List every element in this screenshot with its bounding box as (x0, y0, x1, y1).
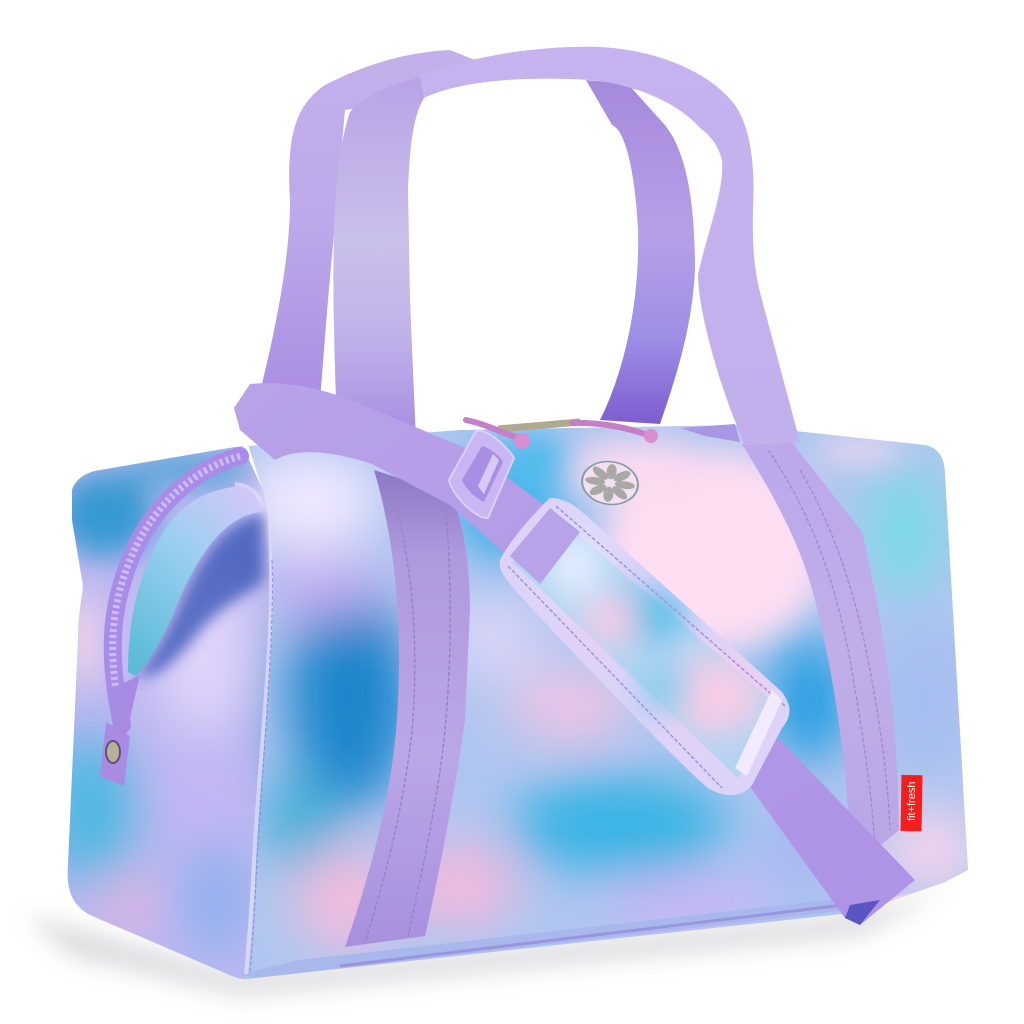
brand tag: fit+fresh (901, 775, 922, 831)
front handle (333, 47, 800, 445)
front handle left leg (333, 76, 424, 440)
pocket flap (128, 486, 262, 676)
logo badge (579, 458, 641, 508)
side panel colour wash (68, 446, 270, 980)
pad lower end flap (735, 690, 782, 776)
front handle top band and right leg (420, 47, 800, 445)
front left strap (345, 470, 470, 947)
front panel colour wash (240, 420, 980, 990)
recessed shadow beside pocket flap (136, 512, 264, 678)
brand tag: fit+fresh: fit+fresh (906, 782, 918, 821)
bag body (40, 420, 980, 990)
corner seam between side and front panels (235, 484, 272, 974)
zipper pulls (466, 420, 740, 449)
back handle right leg (586, 80, 695, 424)
zipper (110, 456, 240, 735)
zipper end tab with snap (100, 722, 130, 786)
shoulder pad stitching (508, 506, 785, 788)
ground shadow (25, 890, 945, 995)
crossbody strap (234, 383, 915, 925)
back handle left leg (262, 50, 480, 400)
shoulder pad fill (512, 512, 776, 778)
back handle (262, 50, 695, 424)
slider buckle (449, 431, 514, 518)
front right strap (742, 440, 899, 870)
strap end at pad top (510, 508, 580, 584)
shoulder pad (500, 498, 790, 795)
bottom seam (240, 882, 945, 978)
